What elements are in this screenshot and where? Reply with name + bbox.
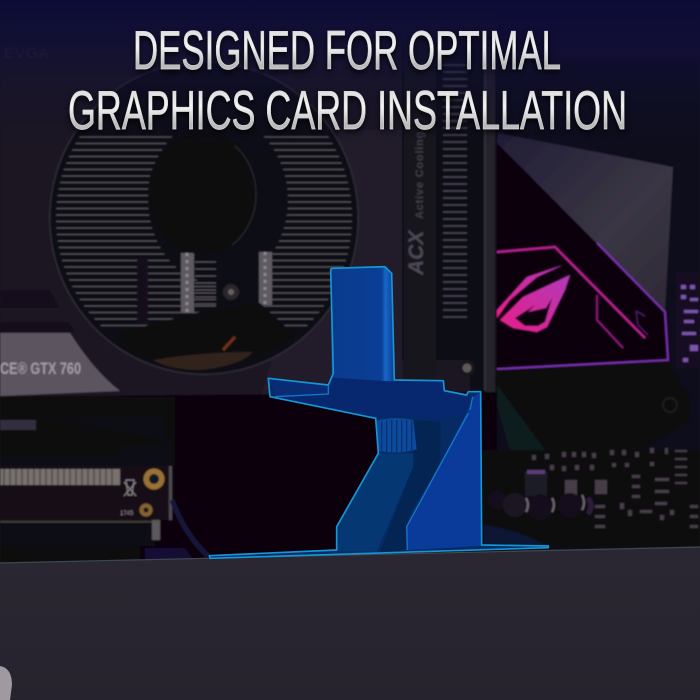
fan hub (148, 132, 256, 254)
dark case interior (0, 392, 497, 560)
GTX nameplate: CE® GTX 760 (0, 359, 81, 378)
ACX cooling side (402, 40, 497, 392)
capacitors (488, 491, 591, 520)
mount holes (144, 468, 164, 490)
heatsink wing (497, 133, 673, 312)
fins below hub (195, 262, 216, 304)
heat pipes (181, 252, 272, 313)
shelf tip (270, 379, 328, 397)
shroud vents left (0, 290, 76, 332)
copper base (117, 303, 297, 372)
adjustment knob (377, 418, 417, 453)
fold highlights (275, 385, 473, 550)
mount screw (223, 284, 239, 300)
ROG logo (497, 265, 570, 332)
card corner screw (459, 360, 475, 376)
rear riser (380, 420, 441, 552)
bracket outline (209, 267, 548, 558)
bracket base (209, 267, 548, 558)
expansion slot left (0, 397, 208, 564)
motherboard components lower right (482, 448, 700, 548)
title (68, 19, 627, 141)
heatsink black face (497, 143, 668, 370)
GTX nameplate (0, 333, 120, 396)
corner sticker (0, 666, 12, 700)
fan (40, 61, 370, 375)
upright tab (331, 267, 394, 382)
motherboard components right edge (676, 272, 700, 368)
top shelf (277, 378, 468, 420)
front leg (337, 453, 413, 552)
heatsink fins (40, 137, 370, 326)
ROG heatsink (497, 133, 691, 452)
motherboard right background (497, 20, 700, 560)
EVGA logo: EVGA (4, 45, 50, 62)
purple edge line (497, 243, 668, 369)
front panel of case (0, 547, 700, 700)
ACX logo: ACX (405, 229, 428, 276)
side fins (443, 65, 467, 317)
fan centre shadow (148, 116, 288, 284)
PCB (0, 466, 172, 520)
blue cable (484, 525, 545, 545)
graphics card shroud (0, 0, 497, 397)
top navy overlay (0, 0, 700, 150)
fan mount (216, 250, 259, 310)
lower heatsink block (497, 362, 691, 452)
pink trim line (497, 247, 645, 338)
blue bracket (209, 267, 548, 558)
board print: 1745 (120, 511, 134, 517)
Active Cooling label: Active Cooling (414, 131, 426, 219)
right gusset (407, 393, 482, 550)
slot pins (0, 469, 120, 485)
recycling mark (124, 480, 136, 496)
